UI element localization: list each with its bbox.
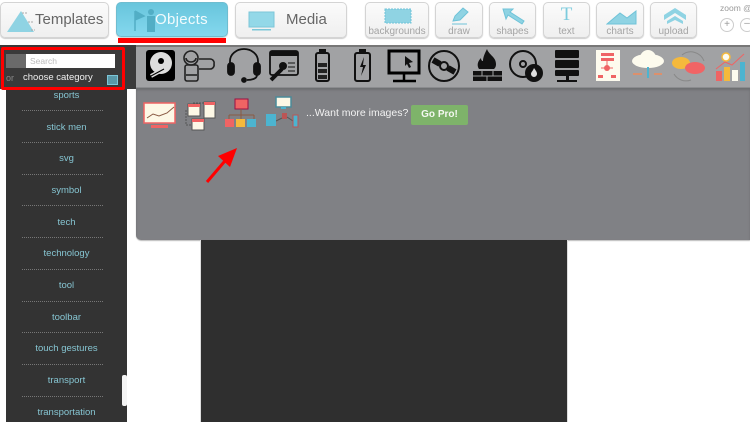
category: transport: transport xyxy=(48,375,85,386)
button: Media xyxy=(235,2,347,38)
category: tool: tool xyxy=(59,280,74,291)
button: backgrounds xyxy=(365,2,429,38)
category: toolbar: toolbar xyxy=(52,312,81,323)
button: Templates xyxy=(0,2,109,38)
label: shapes: shapes xyxy=(496,26,529,37)
search icon tile xyxy=(6,54,26,68)
category: technology: technology xyxy=(44,248,89,259)
icon: line chart monitor xyxy=(143,102,176,128)
zoom minus button xyxy=(740,18,750,32)
zoom plus button xyxy=(720,18,734,32)
icon: charging battery xyxy=(355,49,370,81)
button: shapes xyxy=(489,2,536,38)
label: backgrounds: backgrounds xyxy=(368,26,426,37)
or label: or xyxy=(6,73,14,83)
icon: disc xyxy=(429,51,459,81)
zoom minus button: – xyxy=(744,18,750,29)
icon: headset xyxy=(228,49,260,82)
button: text xyxy=(543,2,590,38)
objects panel xyxy=(136,88,750,240)
button: upload xyxy=(650,2,697,38)
icon strip xyxy=(136,45,750,89)
icon: chevrons up xyxy=(664,8,686,24)
button: charts xyxy=(596,2,644,38)
icon: tables diagram xyxy=(186,102,216,130)
icon: camcorder xyxy=(184,51,214,81)
label: Objects: Objects xyxy=(155,11,208,28)
category: stick men: stick men xyxy=(46,122,87,133)
category: touch gestures: touch gestures xyxy=(35,343,98,354)
icon: area chart xyxy=(606,10,636,24)
zoom control xyxy=(720,3,750,32)
text: want more images: ...Want more images? xyxy=(306,107,408,119)
icon: backgrounds xyxy=(384,8,412,24)
category list xyxy=(22,90,127,418)
label: upload: upload xyxy=(658,26,689,37)
icon: media screen xyxy=(248,12,274,30)
icon: firewall xyxy=(473,49,502,81)
search input xyxy=(26,54,115,68)
icon: server xyxy=(555,50,579,82)
icon: disc fire xyxy=(510,51,542,81)
icon: arrow xyxy=(502,8,525,25)
icon: folder tree xyxy=(225,98,256,127)
choose category label: choose category xyxy=(23,72,93,83)
button: draw xyxy=(435,2,483,38)
icon: analytics chart xyxy=(716,53,745,81)
icon: flowchart document xyxy=(596,50,620,81)
zoom plus button: + xyxy=(724,19,730,30)
button: Go Pro: Go Pro! xyxy=(421,109,458,120)
category sidebar xyxy=(6,88,127,422)
dropdown icon xyxy=(107,75,118,85)
button: Go Pro xyxy=(411,105,468,125)
category: tech: tech xyxy=(58,217,75,228)
category: sports: sports xyxy=(54,90,79,101)
icon: pencil xyxy=(452,8,469,24)
scrollbar thumb xyxy=(122,375,127,406)
button: Objects xyxy=(116,2,228,37)
icon: hard drive xyxy=(146,50,175,81)
category: symbol: symbol xyxy=(51,185,82,196)
icons row xyxy=(146,48,745,83)
icon: cloud network xyxy=(632,50,664,78)
search box highlight xyxy=(1,47,125,90)
icon: flag and person xyxy=(134,9,155,32)
canvas xyxy=(200,240,568,422)
underline highlight xyxy=(118,38,226,43)
icon: templates pyramid xyxy=(7,11,35,32)
icon: settings window xyxy=(270,51,298,80)
search header xyxy=(0,45,136,89)
category: svg: svg xyxy=(59,153,74,164)
search input: Search xyxy=(30,56,57,66)
icon: battery xyxy=(316,49,329,81)
label: Templates: Templates xyxy=(35,11,103,28)
red arrow xyxy=(206,148,237,183)
icon: sync clouds xyxy=(672,52,705,81)
icon: device network xyxy=(266,96,298,128)
icon: monitor cursor xyxy=(389,51,419,81)
label: draw: draw xyxy=(448,26,470,37)
label: Media: Media xyxy=(286,11,327,28)
category: transportation: transportation xyxy=(37,407,96,418)
label: text: text xyxy=(558,26,575,37)
label: charts: charts xyxy=(606,26,634,37)
icon: T: T xyxy=(561,4,572,25)
